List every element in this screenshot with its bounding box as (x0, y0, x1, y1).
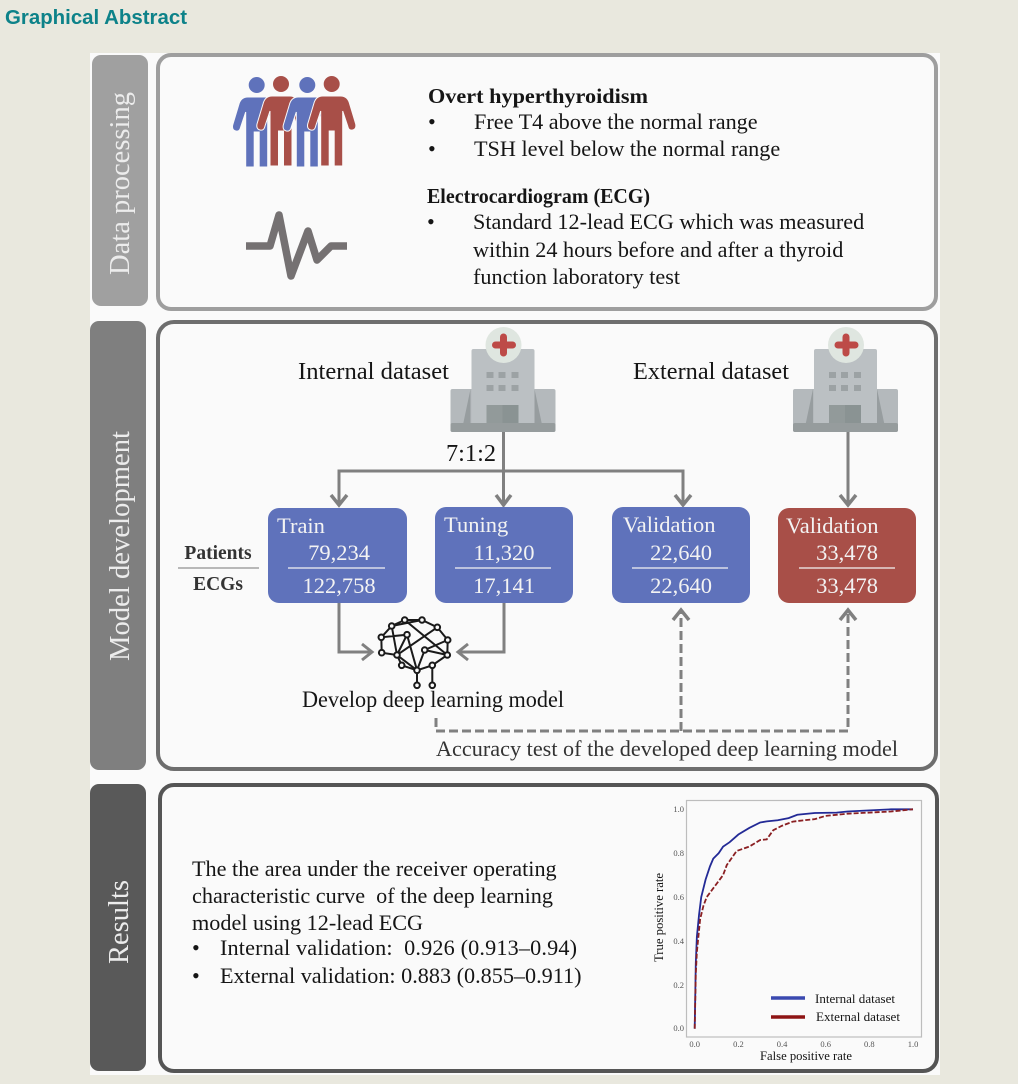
icon: external hospital (793, 327, 898, 432)
row label: patients over ECGs: Patients (184, 543, 252, 564)
y axis tick labels: 0.8 (673, 848, 684, 858)
y axis tick labels: 0.2 (673, 980, 684, 990)
row label: patients over ECGs (178, 543, 259, 595)
arrow: tuning to model (458, 603, 504, 660)
curve: internal dataset (695, 809, 913, 1029)
text: results summary (192, 856, 582, 988)
y axis tick labels (673, 804, 685, 1033)
white content background (90, 53, 940, 1075)
box: external validation: 33,478 (816, 573, 878, 598)
side label: model development (90, 321, 146, 770)
heading: external dataset: External dataset (633, 358, 789, 385)
box: train: Train (277, 513, 325, 538)
side label: data processing (92, 55, 148, 306)
legend (771, 991, 900, 1024)
text: overt hyperthyroidism criteria: • (428, 109, 436, 134)
legend: Internal dataset (815, 991, 895, 1006)
text: results summary: Internal validation: 0.926 (0.913–0.94) (220, 935, 577, 960)
heading: internal dataset: Internal dataset (298, 358, 449, 385)
x axis tick labels (689, 1039, 918, 1049)
arrow: train to model (339, 603, 372, 660)
split ratio label: 7:1:2 (446, 440, 496, 467)
arrow: external dataset to validation (840, 432, 856, 505)
side label: data processing: Data processing (104, 92, 136, 275)
chart: ROC curves (651, 800, 922, 1063)
panel: results (90, 784, 937, 1071)
side label: model development: Model development (104, 431, 136, 661)
text: electrocardiogram criteria: • (427, 209, 435, 234)
x axis tick labels: 1.0 (908, 1039, 918, 1049)
box: train: 79,234 (308, 540, 370, 565)
text: overt hyperthyroidism criteria: Free T4 above the normal range (474, 109, 758, 134)
text: overt hyperthyroidism criteria (428, 84, 780, 161)
text: results summary: • (192, 935, 200, 960)
side label: results (90, 784, 146, 1071)
y axis tick labels: 0.4 (673, 936, 685, 946)
panel frame: model development (158, 322, 936, 769)
x axis tick labels: 0.8 (864, 1039, 875, 1049)
y axis tick labels: 1.0 (673, 804, 684, 814)
box: external validation: Validation (786, 513, 878, 538)
x axis title: False positive rate (760, 1048, 852, 1063)
box: tuning (435, 507, 573, 603)
dashed arrows: accuracy test (436, 610, 856, 731)
y axis tick labels: 0.6 (673, 892, 684, 902)
box: tuning: 11,320 (473, 540, 535, 565)
text: electrocardiogram criteria: function laboratory test (473, 264, 681, 289)
icon: ECG waveform (246, 215, 347, 276)
box: train (268, 508, 407, 603)
row label: patients over ECGs: ECGs (193, 574, 243, 595)
text: electrocardiogram criteria (427, 184, 864, 289)
x axis tick labels: 0.2 (733, 1039, 744, 1049)
y axis title: True positive rate (651, 873, 666, 962)
label: develop deep learning model: Develop deep learning model (302, 687, 564, 712)
title: Graphical Abstract (5, 7, 187, 29)
icon: internal hospital (450, 327, 556, 432)
panel: data processing (92, 55, 936, 309)
x axis tick labels: 0.6 (820, 1039, 831, 1049)
text: electrocardiogram criteria: Standard 12-lead ECG which was measured (473, 209, 864, 234)
box: train: 122,758 (302, 573, 376, 598)
y axis tick labels: 0.0 (673, 1023, 684, 1033)
icon: neural network brain (378, 617, 451, 688)
legend: External dataset (816, 1009, 900, 1024)
text: results summary: External validation: 0.883 (0.855–0.911) (220, 963, 582, 988)
text: overt hyperthyroidism criteria: TSH level below the normal range (474, 136, 780, 161)
box: internal validation (612, 507, 750, 603)
label: accuracy test: Accuracy test of the developed deep learning model (436, 736, 898, 761)
side label: results: Results (103, 880, 135, 964)
text: results summary: model using 12-lead ECG (192, 910, 423, 935)
icon: group of people (233, 76, 356, 167)
panel frame: results (160, 785, 937, 1071)
text: electrocardiogram criteria: within 24 hours before and after a thyroid (473, 237, 843, 262)
box: tuning: 17,141 (473, 573, 535, 598)
curve: external dataset (695, 809, 913, 1029)
text: results summary: The the area under the receiver operating (192, 856, 557, 881)
x axis tick labels: 0.0 (689, 1039, 700, 1049)
text: results summary: • (192, 963, 200, 988)
text: electrocardiogram criteria: Electrocardiogram (ECG) (427, 184, 650, 208)
text: overt hyperthyroidism criteria: Overt hyperthyroidism (428, 84, 648, 108)
text: results summary: characteristic curve of the deep learning (192, 883, 553, 908)
box: internal validation: 22,640 (650, 540, 712, 565)
box: internal validation: Validation (623, 512, 715, 537)
panel: model development (90, 321, 936, 770)
text: overt hyperthyroidism criteria: • (428, 136, 436, 161)
box: tuning: Tuning (444, 512, 508, 537)
x axis tick labels: 0.4 (777, 1039, 788, 1049)
panel frame: data processing (158, 55, 936, 309)
box: internal validation: 22,640 (650, 573, 712, 598)
box: external validation (778, 508, 916, 603)
arrows: internal dataset split (331, 432, 691, 505)
box: external validation: 33,478 (816, 540, 878, 565)
